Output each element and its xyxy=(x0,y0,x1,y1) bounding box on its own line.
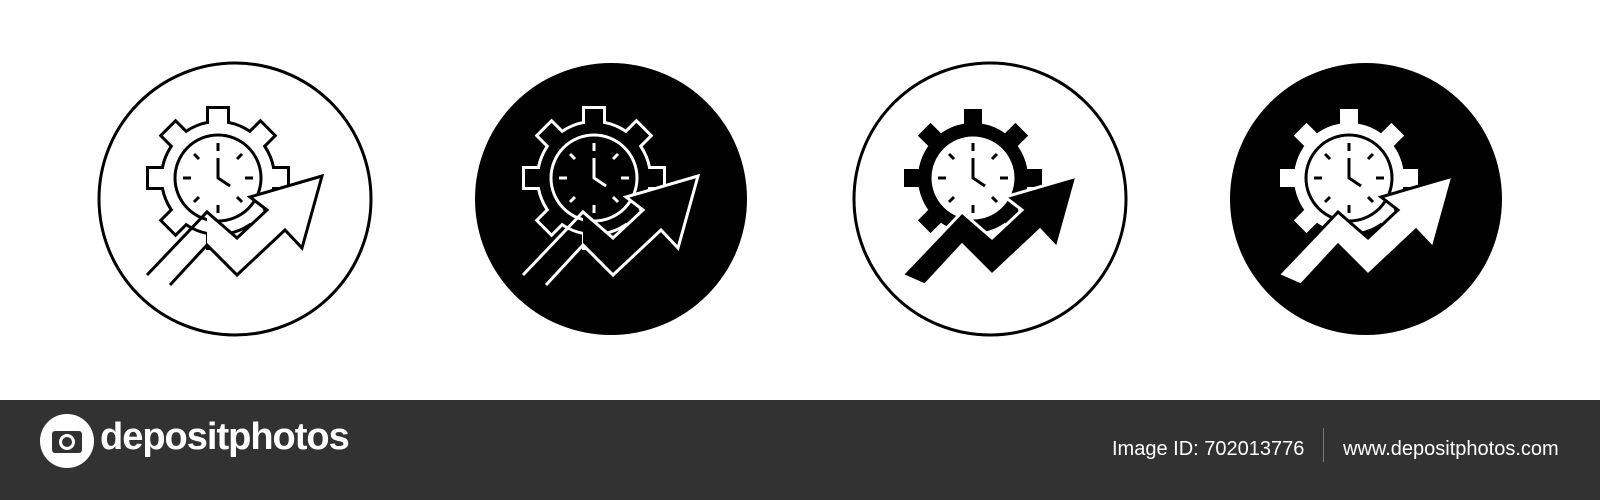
image id: Image ID: 702013776 xyxy=(1112,438,1304,460)
website url: www.depositphotos.com xyxy=(1343,438,1559,460)
logo icon: camera xyxy=(40,414,94,468)
icon 1: outline xyxy=(99,63,371,335)
footer bar xyxy=(0,400,1600,500)
logo text: depositphotos xyxy=(100,416,349,458)
icon 4: filled on black xyxy=(1230,63,1502,335)
icon 2: outline on black xyxy=(475,63,747,335)
icon 3: filled on white xyxy=(854,63,1126,335)
